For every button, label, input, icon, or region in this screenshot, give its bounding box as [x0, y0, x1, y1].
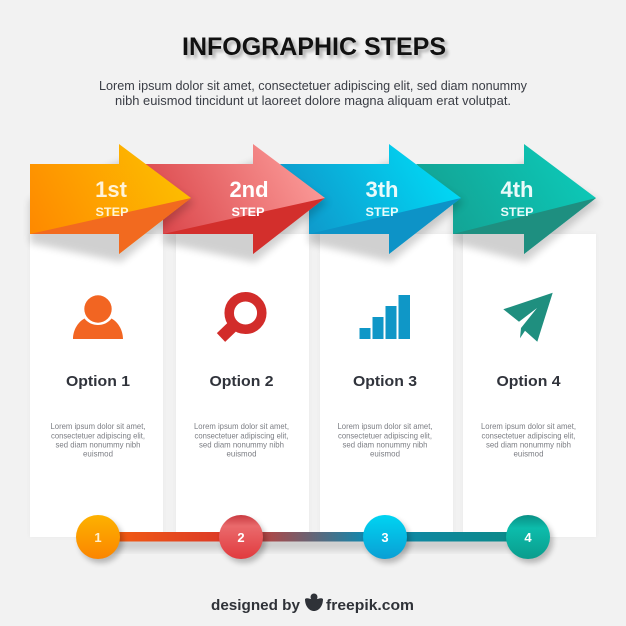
text block: option 4 [481, 421, 576, 458]
title: INFOGRAPHIC STEPS [182, 33, 446, 61]
intro text: nibh euismod tincidunt ut laoreet dolore magna aliquam erat volutpat. [115, 94, 511, 108]
marker 1 [76, 515, 123, 563]
arrow: 1st step [30, 144, 194, 262]
icon: person [73, 295, 123, 339]
footer: designed by freepik: freepik.com [326, 597, 414, 614]
timeline connector [97, 532, 532, 550]
arrow: 3th step: STEP [366, 205, 398, 219]
text block: option 4: sed diam nonummy nibh [486, 440, 571, 450]
panel: card 4 [463, 234, 596, 537]
heading: option 2: Option 2 [210, 373, 274, 390]
panel: card 2 [176, 234, 309, 537]
heading: option 4: Option 4 [496, 373, 561, 390]
icon: magnifier [221, 297, 262, 338]
marker 4: 4 [524, 530, 532, 545]
arrow: 4th step: 4th [500, 177, 534, 202]
intro text [99, 79, 528, 108]
arrow: 1st step: 1st [95, 177, 128, 202]
text block: option 3: consectetuer adipiscing elit, [338, 430, 432, 440]
text block: option 3: sed diam nonummy nibh [342, 440, 428, 450]
text block: option 1: sed diam nonummy nibh [56, 440, 141, 450]
arrow: 4th step [416, 144, 599, 262]
arrow: 2nd step: 2nd [229, 177, 269, 202]
heading: option 3: Option 3 [353, 373, 417, 390]
panel: card 1 [30, 234, 163, 537]
icon: bar chart [360, 295, 410, 339]
marker 1: 1 [94, 530, 102, 545]
arrow: 2nd step: STEP [232, 205, 264, 219]
panel: card 3 [320, 234, 453, 537]
marker 3: 3 [381, 530, 389, 545]
text block: option 4: Lorem ipsum dolor sit amet, [481, 421, 576, 431]
text block: option 2: euismod [226, 448, 257, 458]
intro text: Lorem ipsum dolor sit amet, consectetuer adipiscing elit, sed diam nonummy [99, 79, 528, 93]
text block: option 4: consectetuer adipiscing elit, [482, 430, 576, 440]
text block: option 4: euismod [514, 448, 544, 458]
text block: option 1: Lorem ipsum dolor sit amet, [50, 421, 146, 431]
arrow: 3th step [280, 144, 464, 262]
text block: option 1: euismod [83, 448, 113, 458]
icon: paper plane [503, 293, 553, 342]
footer: designed by freepik: designed by [211, 597, 301, 614]
marker 2 [219, 515, 266, 563]
text block: option 3: Lorem ipsum dolor sit amet, [338, 421, 432, 431]
text block: option 2: Lorem ipsum dolor sit amet, [194, 421, 289, 431]
arrow: 1st step: STEP [96, 205, 128, 219]
heading: option 1: Option 1 [66, 373, 130, 390]
text block: option 2: consectetuer adipiscing elit, [194, 430, 288, 440]
text block: option 1 [50, 421, 146, 458]
marker 4 [506, 515, 553, 563]
text block: option 3: euismod [370, 448, 400, 458]
arrow: 4th step: STEP [500, 205, 534, 219]
title: INFOGRAPHIC STEPS [185, 36, 449, 64]
arrow: 2nd step [140, 144, 328, 262]
arrow: 3th step: 3th [366, 177, 398, 202]
text block: option 1: consectetuer adipiscing elit, [51, 430, 145, 440]
marker 2: 2 [237, 530, 245, 545]
text block: option 2: sed diam nonummy nibh [199, 440, 284, 450]
marker 3 [363, 515, 410, 563]
text block: option 3 [338, 421, 432, 458]
footer: designed by freepik [211, 594, 414, 614]
text block: option 2 [194, 421, 289, 458]
